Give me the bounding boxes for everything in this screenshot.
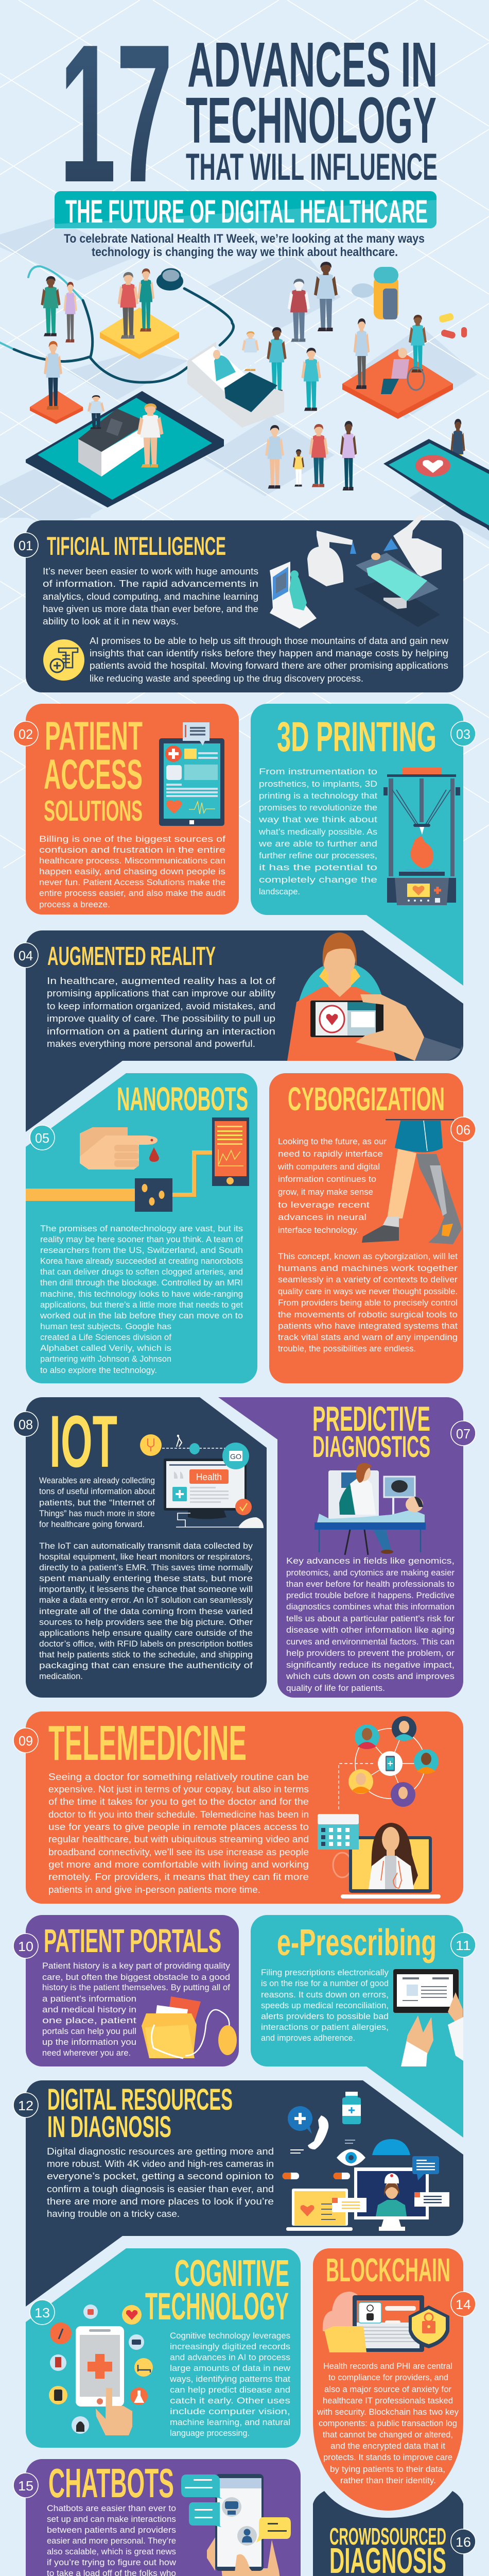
text block 2: From providers being able to precisely control <box>278 1298 458 1308</box>
text block: care, but often the biggest obstacle to a good <box>42 1973 230 1982</box>
text block: never fun. Patient Access Solutions make the <box>39 878 225 887</box>
panel: crowdsourced diagnosis <box>220 2491 476 2576</box>
text block: landscape. <box>259 887 300 896</box>
badge 02 <box>13 721 38 746</box>
badge 01: 01 <box>19 538 33 553</box>
text block: proteomics, and cytomics are making easier <box>286 1568 455 1578</box>
text block: worked out in the lab before they can move on to <box>40 1311 243 1320</box>
heading: TELEMEDICINE <box>48 1716 247 1771</box>
text block 2: quality care in ways we never thought possible. <box>278 1286 458 1296</box>
text block 2: sources to help providers see the big picture. Other <box>39 1618 253 1627</box>
icon: tablet record <box>159 722 224 826</box>
panel: digital resources in diagnosis <box>13 2080 463 2307</box>
heading: IOT <box>49 1401 117 1483</box>
text block: easier and more personal. They’re <box>47 2536 176 2546</box>
badge 06: 06 <box>456 1122 470 1138</box>
panel: patient access solutions <box>13 704 239 914</box>
text block: further refine our processes, <box>259 851 377 860</box>
text block: Cognitive technology leverages <box>170 2331 290 2341</box>
text block: information continues to <box>278 1174 376 1184</box>
panel: artificial intelligence <box>13 515 463 692</box>
text block: machine learning, and natural <box>170 2418 290 2427</box>
text block: what’s medically possible. As <box>258 827 377 837</box>
heading: IN DIAGNOSIS <box>47 2110 171 2144</box>
text block: Looking to the future, as our <box>278 1137 387 1146</box>
text block: researchers from the US, Switzerland, and South <box>40 1246 243 1255</box>
text block: promises to revolutionize the <box>259 803 377 812</box>
text block <box>47 976 276 1049</box>
badge 08 <box>13 1412 38 1436</box>
text block <box>42 1961 231 2058</box>
heading: NANOROBOTS <box>117 1080 248 1117</box>
text block: portals can help you pull <box>42 2027 136 2036</box>
text block: prosthetics, to implants, 3D <box>259 779 377 789</box>
badge 07 <box>451 1421 476 1446</box>
text block: makes everything more personal and powerful. <box>47 1039 255 1049</box>
panel: telemedicine <box>13 1711 463 1904</box>
intro text: technology is changing the way we think about healthcare. <box>92 245 398 259</box>
text block: include computer vision, <box>170 2407 290 2416</box>
hero illustration <box>0 262 489 531</box>
text block: applications, but there’s a little more that needs to get <box>40 1300 243 1310</box>
title <box>59 3 438 223</box>
icon: medical scroll <box>43 639 84 681</box>
text block: From instrumentation to <box>259 767 377 776</box>
text block: that can deliver drugs to soften clogged arteries, and <box>40 1267 243 1277</box>
text block: Wearables are already collecting <box>39 1476 155 1485</box>
badge 12: 12 <box>18 2098 33 2113</box>
text block: have given us more data than ever before, and the <box>43 604 258 614</box>
text block: promising applications that can improve our ability <box>47 988 275 998</box>
text block 2: applications help ensure quality care outside of the <box>39 1629 253 1638</box>
text block <box>286 1556 455 1693</box>
badge 10 <box>13 1934 38 1958</box>
text block: there are more and more places to look if you’re <box>47 2196 274 2207</box>
text block: Patient history is a key part of providing quality <box>42 1961 231 1971</box>
badge 09: 09 <box>19 1733 33 1749</box>
illustration: robotic surgery <box>270 515 442 629</box>
heading <box>145 2253 289 2328</box>
text block: The promises of nanotechnology are vast, but its <box>40 1224 243 1233</box>
text block: human test subjects. Google has <box>40 1322 171 1331</box>
badge 04: 04 <box>19 948 33 963</box>
text block: and the encrypted data that it <box>330 2441 445 2451</box>
text block: happen easily, and chasing down people is <box>39 867 225 876</box>
panel: chatbots <box>13 2459 301 2576</box>
text block: of information. The rapid advancements in <box>43 579 258 589</box>
text block: protects. It stands to improve care <box>323 2452 452 2462</box>
illustration: ultrasound exam <box>315 1463 426 1555</box>
text block: ability to look at it in new ways. <box>43 616 179 626</box>
text block: speeds up medical reconciliation, <box>261 2001 389 2010</box>
reception desk <box>78 439 101 477</box>
text block 2: medication. <box>39 1672 83 1681</box>
text block: patients, but the “Internet of <box>39 1498 155 1507</box>
text block: interactions or patient allergies, <box>261 2023 389 2032</box>
text block: Billing is one of the biggest sources of <box>39 835 226 844</box>
illustration: care network <box>339 1716 439 1811</box>
text block: tons of useful information about <box>39 1487 155 1496</box>
badge 06 <box>451 1117 476 1142</box>
text block: Chatbots are easier than ever to <box>47 2504 176 2513</box>
heading <box>312 1399 430 1464</box>
intro text <box>64 232 425 259</box>
heading: SOLUTIONS <box>44 794 143 827</box>
panel: augmented reality <box>13 930 463 1132</box>
text block: use for years to give people in remote places access to <box>48 1822 309 1832</box>
illustration: doctor on laptop <box>318 1814 441 1899</box>
wheelchair patient <box>381 348 424 394</box>
text block: we are able to further and <box>258 839 377 849</box>
badge 14 <box>451 2292 476 2316</box>
heading: PATIENT PORTALS <box>44 1922 221 1959</box>
heading: PATIENT <box>45 713 143 758</box>
text block 2: seamlessly in a variety of contexts to deliver <box>278 1275 458 1284</box>
text block <box>48 1772 309 1895</box>
badge 05 <box>30 1125 55 1150</box>
text block: between patients and providers <box>47 2526 176 2535</box>
text block: partnering with Johnson & Johnson <box>40 1354 171 1364</box>
badge 07: 07 <box>456 1426 470 1442</box>
text block 2: insights that can identify risks before they happen and manage costs by helping <box>90 648 448 658</box>
illustration: tablet with hands <box>393 1969 463 2066</box>
text block: curves and environmental factors. This can <box>286 1637 455 1647</box>
text block: disease with other information like aging <box>286 1625 455 1635</box>
text block 2 <box>39 1541 253 1681</box>
text block: completely change the <box>259 875 377 885</box>
text block 2: spent manually entering these stats, but more <box>39 1574 253 1583</box>
icon: stethoscope <box>0 266 234 382</box>
text block: also a major source of anxiety for <box>324 2384 451 2394</box>
text block <box>39 1476 155 1529</box>
text block: healthcare process. Miscommunications can <box>39 856 225 866</box>
text block: to also explore the technology. <box>40 1366 157 1375</box>
icon: pill bottle and pills <box>352 267 467 339</box>
text block: confirm a tough diagnosis is easier than ever, and <box>47 2184 274 2194</box>
panel: blockchain <box>313 2248 476 2511</box>
text block <box>169 2331 290 2438</box>
text block: Things” has much more in store <box>39 1509 155 1518</box>
text block 2: trouble, the possibilities are endless. <box>278 1344 416 1353</box>
icon: 3D printer <box>383 768 460 905</box>
text block: expensive. Not just in terms of your copay, but also in terms <box>48 1784 309 1794</box>
badge 16: 16 <box>456 2534 471 2550</box>
heading: DIGITAL RESOURCES <box>47 2083 233 2116</box>
text block: diagnostics combines what this information <box>286 1602 455 1612</box>
phone with heart <box>383 439 489 531</box>
text block: way that we think about <box>258 815 377 824</box>
text block 2: The IoT can automatically transmit data collected by <box>39 1541 253 1551</box>
illustration: secure record <box>323 2292 449 2352</box>
text block: and improves adherence. <box>261 2033 355 2043</box>
text block: remotely. For providers, it means that they can fit more <box>48 1872 309 1882</box>
text block 2: patients who have integrated systems that <box>278 1321 458 1331</box>
text block: Seeing a doctor for something relatively routine can be <box>48 1772 309 1782</box>
text block: broadband connectivity, we’ll see its use increase as people <box>48 1847 309 1857</box>
text block 2: importantly, it lessens the chance that someone will <box>39 1585 253 1594</box>
illustration: connected monitor <box>140 1434 264 1528</box>
panel: nanorobots <box>26 1073 257 1383</box>
text block 2: humans and machines work together <box>278 1263 458 1273</box>
text block: history is the patient themselves. By putting all of <box>42 1983 230 1992</box>
text block: to compliance for providers, and <box>328 2372 448 2382</box>
text block: help providers to prevent the problem, or <box>286 1648 455 1658</box>
text block: then drill through the blockage. Controlled by an MRI <box>40 1278 243 1287</box>
illustration: connected monitor: GO <box>230 1452 241 1461</box>
text block: Health records and PHI are central <box>323 2361 452 2371</box>
text block: ways, identifying patterns that <box>169 2375 290 2384</box>
text block: tells us about a particular patient’s risk for <box>286 1614 455 1623</box>
text block: that cannot be changed or altered, <box>323 2430 453 2439</box>
text block: set up and can make interactions <box>47 2515 176 2524</box>
text block 2: that help patients stick to the schedule, and shipping <box>39 1650 253 1659</box>
orange platform small <box>30 390 83 424</box>
text block <box>39 835 226 909</box>
text block: with security. Blockchain has two key <box>317 2407 459 2417</box>
panel: predictive diagnostics <box>218 1397 476 1698</box>
illustration: man with tablet <box>287 933 462 1061</box>
text block: large amounts of data in new <box>170 2364 290 2373</box>
heading: COGNITIVE <box>174 2253 289 2294</box>
text block: rather than their identity. <box>340 2476 436 2485</box>
text block: interface technology. <box>278 1225 359 1235</box>
heading: CHATBOTS <box>48 2460 174 2506</box>
text block 2: hospital equipment, like heart monitors or respirators, <box>39 1552 253 1562</box>
hospital bed <box>187 342 284 428</box>
text block <box>47 2504 176 2576</box>
badge 09 <box>13 1728 38 1753</box>
text block: significantly reduce its negative impact, <box>286 1660 455 1670</box>
text block: need to rapidly interface <box>278 1149 383 1159</box>
text block: more robust. With 4K video and high-res cameras in <box>47 2159 274 2169</box>
text block: it has the potential to <box>259 862 377 872</box>
illustration: phone with care icons <box>49 2304 153 2435</box>
badge 01 <box>13 533 38 557</box>
badge 11 <box>451 1933 476 1957</box>
text block: if you’re trying to figure out how <box>47 2558 176 2567</box>
text block: language processing. <box>170 2429 250 2438</box>
text block: to leverage recent <box>278 1200 370 1210</box>
text block: analytics, cloud computing, and machine learning <box>43 591 258 602</box>
badge 11: 11 <box>456 1938 471 1953</box>
text block: of the time it takes for you to get to the doctor and for the <box>48 1797 309 1807</box>
text block: information on a patient during an interaction <box>47 1026 275 1037</box>
panel: patient portals <box>13 1915 239 2066</box>
text block <box>317 2361 459 2485</box>
intro text: To celebrate National Health IT Week, we’re looking at the many ways <box>64 232 425 246</box>
text block: Alphabet called Verily, which is <box>40 1344 171 1353</box>
text block: Digital diagnostic resources are getting more and <box>47 2146 274 2157</box>
text block: advances in neural <box>278 1212 366 1222</box>
badge 03: 03 <box>456 726 470 742</box>
text block: patients in and give in-person patients more time. <box>48 1885 260 1895</box>
text block: Korea have already succeeded at creating nanorobots <box>40 1257 243 1266</box>
text block: In healthcare, augmented reality has a lot of <box>47 976 276 986</box>
text block: which cuts down on costs and improves <box>286 1671 455 1681</box>
text block 2: integrate all of the data coming from these varied <box>39 1607 253 1616</box>
heading: ACCESS <box>44 751 143 798</box>
text block: having trouble on a tricky case. <box>47 2209 180 2219</box>
text block: to keep information organized, avoid mistakes, and <box>47 1001 275 1011</box>
illustration: connected monitor: Health <box>196 1472 222 1482</box>
text block: entire process easier, and also make the audit <box>39 889 225 898</box>
patient figures <box>41 262 465 490</box>
badge 02: 02 <box>19 726 33 742</box>
text block: quality of life for patients. <box>286 1683 385 1693</box>
badge 04 <box>13 943 38 968</box>
text block 2: the movements of robotic surgical tools to <box>278 1310 458 1319</box>
text block: components: a public transaction log <box>319 2418 457 2428</box>
big number 17: 17 <box>59 3 173 223</box>
badge 08: 08 <box>19 1417 33 1432</box>
text block: is on the rise for a number of good <box>261 1979 389 1988</box>
text block 2 <box>90 636 449 684</box>
text block: and advances in AI to process <box>170 2353 290 2362</box>
text block: grow, it may make sense <box>278 1187 373 1197</box>
badge 12 <box>13 2093 38 2117</box>
panel: cognitive technology <box>26 2248 301 2448</box>
orange platform big <box>342 349 453 419</box>
text block: can help predict disease and <box>170 2385 290 2395</box>
text block: Filing prescriptions electronically <box>261 1968 389 1977</box>
text block: healthcare IT professionals tasked <box>323 2396 453 2405</box>
text block: process a breeze. <box>39 900 110 909</box>
tablet <box>26 391 224 507</box>
text block <box>258 767 377 896</box>
text block: confusion and frustration in the entire <box>39 845 225 855</box>
text block: by tying patients to their data, <box>330 2464 445 2474</box>
text block 2: doctor’s office, with RFID labels on prescription bottles <box>39 1639 253 1649</box>
illustration: telehealth icons <box>283 2092 449 2231</box>
illustration: prosthetic leg <box>362 1119 462 1244</box>
heading: TIFICIAL INTELLIGENCE <box>47 532 226 561</box>
text block: machine, this technology looks to have wide-ranging <box>40 1290 243 1299</box>
text block 2: packaging that can ensure the authenticity of <box>39 1661 253 1670</box>
text block: printing is a technology that <box>259 791 377 801</box>
text block: everyone’s pocket, getting a second opinion to <box>47 2171 274 2181</box>
heading <box>44 713 143 827</box>
text block: than ever before for health professionals to <box>286 1579 455 1589</box>
illustration: chat on phone <box>181 2474 291 2576</box>
heading <box>329 2523 446 2576</box>
badge 13: 13 <box>34 2305 50 2320</box>
illustration: blood sample to phone <box>26 1117 249 1212</box>
text block <box>40 1224 243 1375</box>
text block <box>261 1968 389 2043</box>
text block <box>43 566 258 626</box>
text block <box>277 1137 387 1235</box>
panel: e-prescribing <box>251 1915 476 2138</box>
text block: and medical history in <box>42 2005 136 2014</box>
text block: one place, patient <box>42 2016 137 2025</box>
badge 15 <box>13 2473 38 2498</box>
text block: predict trouble before it happens. Predictive <box>286 1590 455 1600</box>
text block: increasingly digitized records <box>170 2342 290 2351</box>
text block: also scalable, which is great news <box>47 2547 176 2556</box>
icon: folder and mouse <box>142 1996 237 2058</box>
badge 13 <box>30 2300 55 2325</box>
text block 2 <box>278 1251 458 1353</box>
text block: doctor to fit you into their schedule. Telemedicine has been in <box>48 1809 309 1820</box>
badge 05: 05 <box>35 1130 49 1146</box>
text block 2: make a data entry error. An IoT solution can seamlessly <box>39 1596 253 1605</box>
panel: IoT <box>13 1397 267 1698</box>
text block 2: This concept, known as cyborgization, will let <box>278 1251 458 1261</box>
text block: for healthcare going forward. <box>39 1520 145 1529</box>
text block: Key advances in fields like genomics, <box>286 1556 455 1566</box>
text block 2: directly to a patient’s EMR. This saves time normally <box>39 1563 253 1572</box>
text block: need wherever you are. <box>42 2048 131 2058</box>
badge 16 <box>451 2529 476 2554</box>
text block: catch it early. Other uses <box>170 2396 290 2405</box>
badge 14: 14 <box>456 2297 471 2312</box>
badge 10: 10 <box>18 1939 33 1954</box>
text block: reasons. It cuts down on errors, <box>261 1990 389 1999</box>
text block 2: like reducing waste and speeding up the drug discovery process. <box>90 673 363 684</box>
text block: a patient’s information <box>42 1994 136 2004</box>
panel: cyborgization <box>269 1073 476 1383</box>
text block: get more and more comfortable with living and working <box>48 1859 309 1870</box>
panel: 3D printing <box>251 704 476 986</box>
text block <box>47 2146 274 2219</box>
text block: alerts providers to possible bad <box>261 2012 389 2021</box>
text block 2: track vital stats and warn of any impending <box>278 1332 458 1342</box>
badge 15: 15 <box>18 2478 33 2494</box>
heading: TECHNOLOGY <box>145 2285 289 2328</box>
text block: regular healthcare, but with ubiquitous streaming video and <box>48 1834 309 1844</box>
text block: created a Life Sciences division of <box>40 1333 171 1342</box>
text block 2: patients avoid the hospital. Moving forward there are other promising applications <box>90 660 448 671</box>
yellow platform <box>100 308 179 359</box>
text block: It’s never been easier to work with huge amounts <box>43 566 258 577</box>
heading <box>47 2083 233 2144</box>
text block: reality may be here sooner than you think. A team of <box>40 1235 243 1244</box>
heading: AUGMENTED REALITY <box>47 941 216 971</box>
text block 2: AI promises to be able to help us sift through those mountains of data and gain new <box>90 636 449 646</box>
text block: with computers and digital <box>277 1162 380 1172</box>
text block: up the information you <box>42 2038 136 2047</box>
text block: improve quality of care. The possibility to pull up <box>47 1013 275 1024</box>
badge 03 <box>451 721 476 746</box>
